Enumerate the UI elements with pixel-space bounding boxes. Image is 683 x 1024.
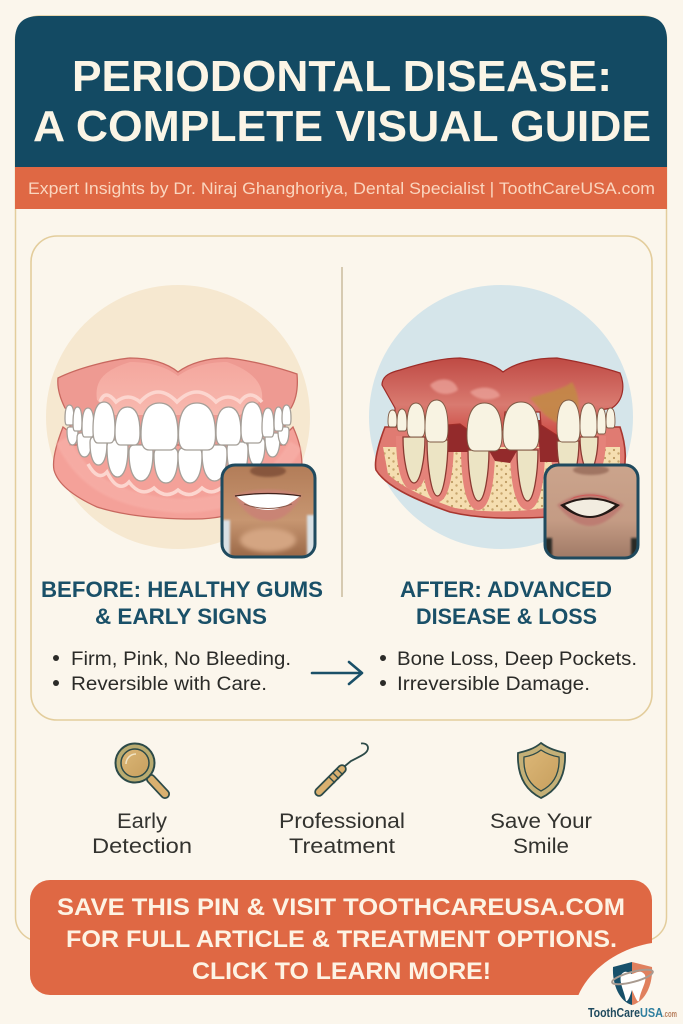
feature: professional treatment: Professional (279, 810, 405, 833)
upper gum (382, 358, 623, 436)
header banner (15, 16, 667, 167)
feature: save your smile: Save Your (490, 810, 592, 833)
feature: professional treatment (279, 743, 405, 858)
illustration: advanced disease (369, 285, 633, 549)
feature: early detection: Early (117, 810, 168, 833)
bullets: before: Reversible with Care. (71, 674, 267, 695)
title: A COMPLETE VISUAL GUIDE (33, 102, 651, 151)
call to action banner: CLICK TO LEARN MORE! (192, 958, 491, 985)
title: PERIODONTAL DISEASE: (72, 52, 612, 101)
heading: before (41, 577, 323, 629)
icon: dental probe (319, 743, 368, 792)
dark receded gaps (447, 418, 560, 463)
call to action banner (30, 880, 652, 995)
illustration: healthy gums (46, 285, 310, 549)
feature: save your smile (490, 743, 592, 858)
inset photo: healthy smile (222, 465, 315, 557)
bullets: after (380, 649, 637, 695)
bullets: after: Bone Loss, Deep Pockets. (397, 649, 637, 670)
subtitle band: Expert Insights by Dr. Niraj Ghanghoriya, Dental Specialist | ToothCareUSA.com (28, 179, 655, 198)
feature: early detection (92, 744, 192, 858)
lower teeth (67, 427, 289, 483)
diseased crowns (388, 400, 615, 451)
logo: ToothCareUSA (578, 943, 683, 1024)
icon: tooth shield (611, 962, 654, 1005)
bullets: before: Firm, Pink, No Bleeding. (71, 649, 291, 670)
heading: after (400, 577, 612, 629)
exposed roots (403, 437, 598, 501)
heading: after: DISEASE & LOSS (416, 604, 597, 629)
call to action banner: FOR FULL ARTICLE & TREATMENT OPTIONS. (66, 926, 617, 953)
bullets: after: Irreversible Damage. (397, 674, 590, 695)
arrow (312, 662, 362, 684)
title (33, 52, 651, 151)
feature: early detection: Detection (92, 835, 192, 858)
feature: save your smile: Smile (513, 835, 569, 858)
panel: before and after comparison (31, 236, 652, 720)
tartar patch (530, 382, 579, 425)
upper teeth (65, 402, 291, 450)
feature: professional treatment: Treatment (289, 835, 395, 858)
wordmark: ToothCare (588, 1005, 640, 1020)
call to action banner: SAVE THIS PIN & VISIT TOOTHCAREUSA.COM (57, 894, 625, 921)
icon: magnifying glass (116, 744, 165, 794)
heading: before: & EARLY SIGNS (95, 604, 267, 629)
wordmark: USA (640, 1005, 664, 1020)
gum scallops (88, 464, 248, 495)
bullets: before (53, 649, 291, 695)
heading: before: BEFORE: HEALTHY GUMS (41, 577, 323, 602)
heading: after: AFTER: ADVANCED (400, 577, 612, 602)
icon: shield (518, 743, 565, 798)
lower jaw with bone (375, 427, 625, 518)
inset photo: diseased gums (545, 465, 638, 558)
subtitle band (15, 167, 667, 209)
